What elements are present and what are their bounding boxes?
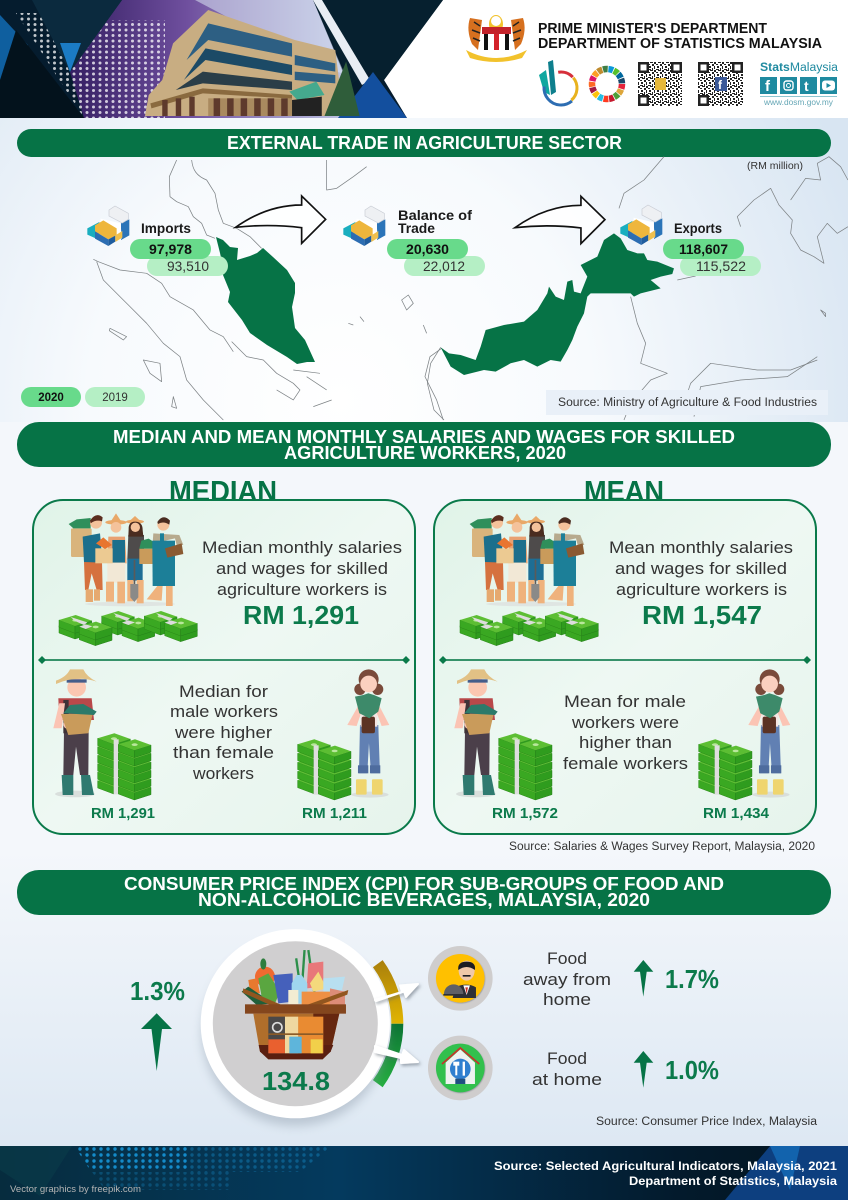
value: food at home: 1.0% xyxy=(665,1055,719,1085)
StatsMalaysia social block: f xyxy=(765,78,771,95)
divider xyxy=(439,656,811,664)
department title: PRIME MINISTER'S DEPARTMENT xyxy=(538,21,767,37)
mean overall text: and wages for skilled xyxy=(615,559,787,578)
panel: mean xyxy=(434,500,816,834)
balance of trade figures: 22,012 xyxy=(423,258,465,274)
median overall text: Median monthly salaries xyxy=(202,538,402,557)
source: salaries survey: Source: Salaries & Wages Survey Report, Malaysia, 2020 xyxy=(509,841,815,853)
map outlines of neighbouring countries xyxy=(93,157,848,420)
legend: years: 2020 xyxy=(38,392,64,404)
imports figures xyxy=(130,220,228,276)
mean comparison text: workers were xyxy=(571,713,679,732)
exports figures: Exports xyxy=(674,220,722,236)
label: food away from home: home xyxy=(543,990,591,1009)
median female value: RM 1,211 xyxy=(302,805,367,822)
icon: imports containers xyxy=(87,206,129,246)
arrow: to food away from home xyxy=(375,984,418,1001)
exports figures: 115,522 xyxy=(696,258,746,274)
icon: exports containers xyxy=(620,205,662,245)
median comparison text xyxy=(170,682,278,783)
StatsMalaysia social block: StatsMalaysia xyxy=(760,62,839,74)
DOSM logo xyxy=(537,60,585,112)
building xyxy=(145,10,360,116)
illustration: female farmer xyxy=(748,669,790,798)
label: food at home: at home xyxy=(532,1070,602,1089)
exports figures xyxy=(663,220,761,276)
QR code: facebook: f xyxy=(718,78,723,92)
StatsMalaysia social block: www.dosm.gov.my xyxy=(763,97,834,107)
department title xyxy=(538,21,823,52)
mean overall text: agriculture workers is xyxy=(616,580,787,599)
label: food at home: Food xyxy=(547,1049,587,1068)
illustration: male farmer xyxy=(53,669,97,797)
panel: median xyxy=(33,500,415,834)
icon: up arrow xyxy=(141,1013,172,1071)
arrow: balance to exports xyxy=(515,196,605,244)
heading: salaries and wages xyxy=(17,422,831,467)
subheading: mean: MEAN xyxy=(584,476,664,508)
median value: RM 1,291 xyxy=(243,600,359,630)
mean comparison text: female workers xyxy=(563,754,688,773)
heading: salaries and wages: MEDIAN AND MEAN MONTHLY SALARIES AND WAGES FOR SKILLED xyxy=(113,426,735,447)
icon: up arrow food at home xyxy=(634,1051,653,1088)
illustration: female farmer xyxy=(347,669,389,798)
mean female value: RM 1,434 xyxy=(703,805,770,822)
mean comparison text: higher than xyxy=(579,733,672,752)
footer band xyxy=(0,1146,848,1200)
heading: consumer price index xyxy=(17,870,831,915)
illustration: male farmer xyxy=(454,669,498,797)
median comparison text: than female xyxy=(173,743,274,762)
map: Peninsular Malaysia xyxy=(216,237,315,364)
coat of arms xyxy=(466,15,527,62)
subheading: median: MEDIAN xyxy=(169,476,277,508)
icon: balance containers xyxy=(343,206,385,246)
source: CPI: Source: Consumer Price Index, Malaysia xyxy=(596,1116,818,1128)
balance of trade figures: Trade xyxy=(398,220,435,236)
icon: home dining xyxy=(428,1036,493,1100)
illustration: female money stack xyxy=(298,739,351,800)
illustration: male money stack xyxy=(98,733,151,800)
illustration: farm workers xyxy=(69,513,183,606)
imports figures: Imports xyxy=(141,220,191,236)
arrow: imports to balance xyxy=(236,196,326,243)
illustration: money pile xyxy=(460,611,598,646)
source: agriculture ministry: Source: Ministry of Agriculture & Food Industries xyxy=(558,397,817,409)
balance of trade figures: Balance of xyxy=(398,207,472,223)
median comparison text: male workers xyxy=(170,702,278,721)
illustration: money pile xyxy=(59,611,197,646)
CPI value: 134.8 xyxy=(262,1066,330,1096)
overall CPI change: 1.3% xyxy=(130,976,185,1006)
heading: external trade xyxy=(17,129,831,157)
department title: DEPARTMENT OF STATISTICS MALAYSIA xyxy=(538,36,823,52)
overall CPI change xyxy=(130,976,185,1071)
QR code: website xyxy=(638,62,682,106)
median overall text xyxy=(202,538,402,599)
icon: grocery basket xyxy=(242,950,348,1059)
arc: sub-group ring xyxy=(378,964,397,1084)
imports figures: 93,510 xyxy=(167,258,209,274)
label: food away from home: Food xyxy=(547,949,587,968)
median overall text: agriculture workers is xyxy=(217,580,387,599)
mean overall text: Mean monthly salaries xyxy=(609,538,793,557)
label: food away from home: away from xyxy=(523,970,611,989)
balance of trade figures xyxy=(387,207,485,276)
source: agriculture ministry xyxy=(546,390,828,415)
legend: years: 2019 xyxy=(102,392,128,404)
icon: up arrow food away xyxy=(634,960,653,997)
mean value: RM 1,547 xyxy=(642,600,762,630)
median comparison text: were higher xyxy=(174,723,272,742)
illustration: female money stack xyxy=(699,739,752,800)
divider xyxy=(38,656,410,664)
arrow: to food at home xyxy=(375,1046,418,1063)
basket circle xyxy=(201,929,390,1126)
QR code: facebook xyxy=(698,62,743,106)
StatsMalaysia social block: t xyxy=(804,78,809,94)
label: food away from home xyxy=(523,949,611,1009)
header banner with building photo xyxy=(0,0,848,118)
unit note: (RM million) xyxy=(747,160,803,172)
heading: external trade: EXTERNAL TRADE IN AGRICULTURE SECTOR xyxy=(227,132,622,153)
median male value: RM 1,291 xyxy=(91,805,155,822)
StatsMalaysia social block xyxy=(760,62,839,107)
value: food away from home: 1.7% xyxy=(665,964,719,994)
footer source text: Source: Selected Agricultural Indicators, Malaysia, 2021 xyxy=(494,1159,837,1173)
label: food at home xyxy=(532,1049,602,1089)
imports figures: 97,978 xyxy=(149,241,192,257)
heading: consumer price index: NON-ALCOHOLIC BEVERAGES, MALAYSIA, 2020 xyxy=(198,889,650,910)
footer department text: Department of Statistics, Malaysia xyxy=(629,1174,837,1188)
legend: years xyxy=(21,387,145,407)
mean male value: RM 1,572 xyxy=(492,805,558,822)
mean overall text xyxy=(609,538,793,599)
map: Sabah and Sarawak xyxy=(441,233,674,375)
mean comparison text: Mean for male xyxy=(564,692,686,711)
heading: salaries and wages: AGRICULTURE WORKERS, 2020 xyxy=(284,442,566,463)
balance of trade figures: 20,630 xyxy=(406,241,449,257)
vector credit: Vector graphics by freepik.com xyxy=(10,1184,141,1195)
exports figures: 118,607 xyxy=(679,241,728,257)
median comparison text: Median for xyxy=(179,682,268,701)
median comparison text: workers xyxy=(192,764,254,783)
heading: consumer price index: CONSUMER PRICE INDEX (CPI) FOR SUB-GROUPS OF FOOD AND xyxy=(124,873,724,894)
SDG wheel xyxy=(592,69,622,99)
illustration: male money stack xyxy=(499,733,552,800)
icon: waiter xyxy=(428,946,493,1011)
panel: trade map xyxy=(93,157,848,420)
illustration: farm workers xyxy=(470,513,584,606)
mean comparison text xyxy=(563,692,688,773)
median overall text: and wages for skilled xyxy=(216,559,388,578)
